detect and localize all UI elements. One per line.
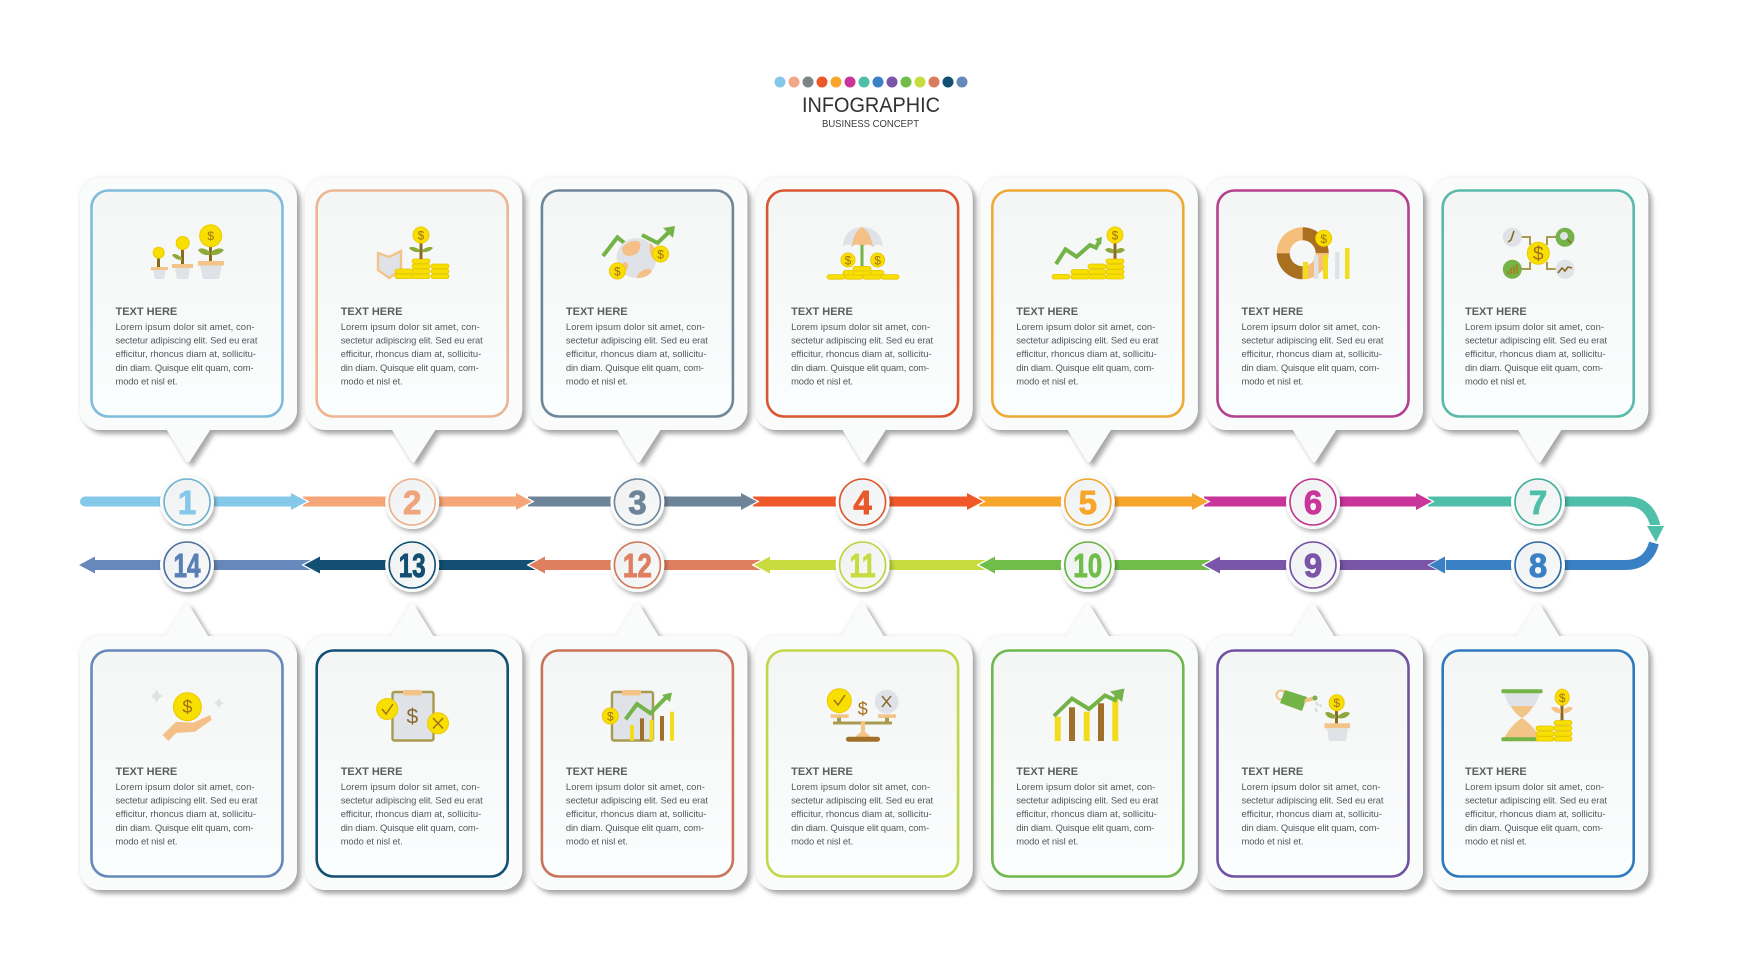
body text: sectetur adipiscing elit. Sed eu erat [116,795,258,806]
subheading: BUSINESS CONCEPT [822,118,920,130]
frame [767,190,958,416]
card [305,178,522,462]
icon: shield and coins: $ [418,228,425,242]
body text: sectetur adipiscing elit. Sed eu erat [566,795,708,806]
arrow 4 [753,493,983,510]
icon: donut chart and bars: $ [1320,232,1327,246]
title text: TEXT HERE [1465,306,1527,318]
body text: Lorem ipsum dolor sit amet, con- [341,781,480,792]
panel 4 [756,178,973,462]
body text: sectetur adipiscing elit. Sed eu erat [566,335,708,346]
frame [317,190,508,416]
badge 9 [1286,538,1340,592]
body text: Lorem ipsum dolor sit amet, con- [1242,321,1380,332]
panel 8 [1431,604,1648,890]
frame [1443,190,1634,416]
arrow 1 [80,493,307,510]
body text: efficitur, rhoncus diam at, sollicitu- [566,808,706,819]
title text: TEXT HERE [341,766,402,778]
body text: sectetur adipiscing elit. Sed eu erat [1016,795,1159,806]
body text: din diam. Quisque elit quam, com- [341,822,479,833]
title text: TEXT HERE [116,766,177,778]
card [1206,604,1423,890]
body text: din diam. Quisque elit quam, com- [1016,822,1154,833]
body text: efficitur, rhoncus diam at, sollicitu- [341,808,481,819]
body text: modo et nisl et. [1242,835,1304,846]
frame [1443,650,1634,876]
panel 11 [756,604,973,890]
body text: sectetur adipiscing elit. Sed eu erat [1465,795,1607,806]
body text: Lorem ipsum dolor sit amet, con- [791,781,930,792]
arrow 8 [1429,543,1654,574]
frame [992,650,1183,876]
badge 8: 8 [1529,547,1547,584]
icon: balance scale: $ [858,699,868,719]
panel 1 [80,178,297,462]
body text: efficitur, rhoncus diam at, sollicitu- [341,348,481,359]
body text: sectetur adipiscing elit. Sed eu erat [341,795,483,806]
frame [92,190,282,416]
icon: bar chart with arrow [1054,688,1124,741]
body text: modo et nisl et. [1016,375,1078,386]
badge 13: 13 [399,547,426,584]
panel 5 [981,178,1198,462]
body text: din diam. Quisque elit quam, com- [566,362,704,373]
badge 4: 4 [853,484,872,521]
badge 5: 5 [1079,484,1097,521]
body text: Lorem ipsum dolor sit amet, con- [1465,321,1604,332]
body text: sectetur adipiscing elit. Sed eu erat [341,335,483,346]
body text: sectetur adipiscing elit. Sed eu erat [116,335,258,346]
icon: watering can and plant: $ [1333,696,1340,710]
body text: efficitur, rhoncus diam at, sollicitu- [566,348,706,359]
badge 9: 9 [1304,547,1322,584]
body text: din diam. Quisque elit quam, com- [116,362,254,373]
body text: modo et nisl et. [341,835,403,846]
card [981,604,1198,890]
body text: efficitur, rhoncus diam at, sollicitu- [791,348,932,359]
body text: Lorem ipsum dolor sit amet, con- [341,321,480,332]
frame [542,650,733,876]
body text: efficitur, rhoncus diam at, sollicitu- [1016,348,1157,359]
card [80,178,297,462]
frame [92,650,282,876]
arrow 3 [528,493,757,510]
card [1431,178,1648,462]
card [530,604,747,890]
badge 6 [1286,475,1340,529]
icon: umbrella over coins: $ [874,254,881,268]
body text: modo et nisl et. [1465,835,1527,846]
card [305,604,522,890]
badge 1 [160,475,214,529]
title text: TEXT HERE [1016,306,1078,318]
icon: umbrella over coins: $ [845,254,852,268]
frame [992,190,1183,416]
colour dots [774,76,968,88]
title text: TEXT HERE [791,766,853,778]
arrow 5 [979,493,1208,510]
title text: TEXT HERE [1242,306,1303,318]
body text: efficitur, rhoncus diam at, sollicitu- [1242,808,1382,819]
badge 2 [385,475,439,529]
badge 11: 11 [850,547,876,584]
badge 12 [610,538,664,592]
badge 8 [1511,538,1565,592]
body text: modo et nisl et. [791,835,853,846]
icon: globe with growth arrow [603,226,675,279]
title text: TEXT HERE [566,306,628,318]
body text: sectetur adipiscing elit. Sed eu erat [1242,795,1384,806]
card [756,604,973,890]
body text: sectetur adipiscing elit. Sed eu erat [1016,335,1159,346]
panel 9 [1206,604,1423,890]
panel 2 [305,178,522,462]
arrow 6 [1204,493,1432,510]
frame [317,650,508,876]
panel 13 [305,604,522,890]
title text: TEXT HERE [566,766,628,778]
card [80,604,297,890]
icon: rising arrow and coins: $ [1112,228,1119,242]
icon: coin over hand: $ [182,697,192,717]
badge 1: 1 [178,484,196,521]
body text: modo et nisl et. [116,375,178,386]
badge 6: 6 [1304,484,1322,521]
body text: efficitur, rhoncus diam at, sollicitu- [1242,348,1382,359]
badge 5 [1061,475,1115,529]
badge 10: 10 [1073,547,1102,584]
body text: Lorem ipsum dolor sit amet, con- [566,781,705,792]
body text: din diam. Quisque elit quam, com- [1016,362,1154,373]
body text: sectetur adipiscing elit. Sed eu erat [791,335,933,346]
body text: din diam. Quisque elit quam, com- [1242,362,1380,373]
body text: modo et nisl et. [116,835,178,846]
body text: efficitur, rhoncus diam at, sollicitu- [116,808,256,819]
body text: din diam. Quisque elit quam, com- [1242,822,1380,833]
card [756,178,973,462]
body text: efficitur, rhoncus diam at, sollicitu- [1465,348,1606,359]
title text: TEXT HERE [341,306,402,318]
body text: Lorem ipsum dolor sit amet, con- [1465,781,1604,792]
icon: coin over hand [150,689,224,741]
card [1431,604,1648,890]
arrow 7 [1428,502,1664,542]
icon: globe with growth arrow: $ [657,248,664,262]
title text: TEXT HERE [116,306,177,318]
icon: donut chart and bars [1277,227,1350,279]
arrow 11 [754,556,987,574]
body text: Lorem ipsum dolor sit amet, con- [1016,781,1155,792]
heading: INFOGRAPHIC [802,94,940,117]
body text: Lorem ipsum dolor sit amet, con- [116,321,254,332]
body text: din diam. Quisque elit quam, com- [791,362,929,373]
body text: din diam. Quisque elit quam, com- [566,822,704,833]
body text: sectetur adipiscing elit. Sed eu erat [1465,335,1607,346]
body text: din diam. Quisque elit quam, com- [791,822,929,833]
body text: modo et nisl et. [1465,375,1527,386]
body text: din diam. Quisque elit quam, com- [1465,822,1603,833]
icon: growing plants [151,225,224,279]
body text: efficitur, rhoncus diam at, sollicitu- [116,348,256,359]
badge 13 [385,538,439,592]
badge 14: 14 [174,547,201,584]
panel 3 [530,178,747,462]
card [981,178,1198,462]
badge 7: 7 [1529,484,1547,521]
icon: clipboard with growth chart [602,690,674,741]
icon: growing plants: $ [207,229,214,243]
icon: rising arrow and coins [1052,227,1125,279]
frame [1218,650,1408,876]
badge 4 [836,475,890,529]
title text: TEXT HERE [791,306,853,318]
arrow 2 [303,493,532,510]
frame [1218,190,1408,416]
icon: hourglass and coins: $ [1559,691,1566,705]
body text: sectetur adipiscing elit. Sed eu erat [1242,335,1384,346]
panel 14 [80,604,297,890]
icon: clipboard with growth chart: $ [607,710,614,724]
body text: modo et nisl et. [791,375,853,386]
body text: Lorem ipsum dolor sit amet, con- [791,321,930,332]
icon: hourglass and coins [1502,689,1573,741]
title block [774,76,968,130]
body text: din diam. Quisque elit quam, com- [341,362,479,373]
icon: connected finance nodes: $ [1533,244,1544,265]
icon: balance scale [827,689,899,742]
badge 11 [836,538,890,592]
badge 14 [160,538,214,592]
card [1206,178,1423,462]
arrow 12 [529,556,762,574]
body text: din diam. Quisque elit quam, com- [116,822,254,833]
arrow 14 [79,556,312,574]
icon: globe with growth arrow: $ [614,264,621,278]
body text: modo et nisl et. [566,835,628,846]
body text: modo et nisl et. [1242,375,1304,386]
badge 12: 12 [623,547,652,584]
badge 3 [610,475,664,529]
body text: Lorem ipsum dolor sit amet, con- [1242,781,1380,792]
icon: connected finance nodes [1503,228,1574,279]
badge 7 [1511,475,1565,529]
badge 2: 2 [403,484,421,521]
arrow 13 [304,556,537,574]
icon: clipboard with check and cross: $ [407,706,419,728]
frame [542,190,733,416]
title text: TEXT HERE [1465,766,1527,778]
arrow 10 [979,556,1212,574]
icon: clipboard with check and cross [377,690,448,740]
panel 12 [530,604,747,890]
icon: watering can and plant [1276,690,1350,741]
body text: modo et nisl et. [1016,835,1078,846]
body text: Lorem ipsum dolor sit amet, con- [1016,321,1155,332]
body text: modo et nisl et. [566,375,628,386]
body text: Lorem ipsum dolor sit amet, con- [116,781,254,792]
frame [767,650,958,876]
title text: TEXT HERE [1242,766,1303,778]
body text: modo et nisl et. [341,375,403,386]
badge 3: 3 [628,484,647,521]
body text: efficitur, rhoncus diam at, sollicitu- [791,808,932,819]
icon: umbrella over coins [827,227,899,279]
icon: shield and coins [378,227,449,279]
body text: efficitur, rhoncus diam at, sollicitu- [1465,808,1606,819]
panel 7 [1431,178,1648,462]
body text: Lorem ipsum dolor sit amet, con- [566,321,705,332]
body text: efficitur, rhoncus diam at, sollicitu- [1016,808,1157,819]
panel 10 [981,604,1198,890]
arrow 9 [1204,556,1437,574]
body text: din diam. Quisque elit quam, com- [1465,362,1603,373]
badge 10 [1061,538,1115,592]
panel 6 [1206,178,1423,462]
title text: TEXT HERE [1016,766,1078,778]
card [530,178,747,462]
body text: sectetur adipiscing elit. Sed eu erat [791,795,933,806]
